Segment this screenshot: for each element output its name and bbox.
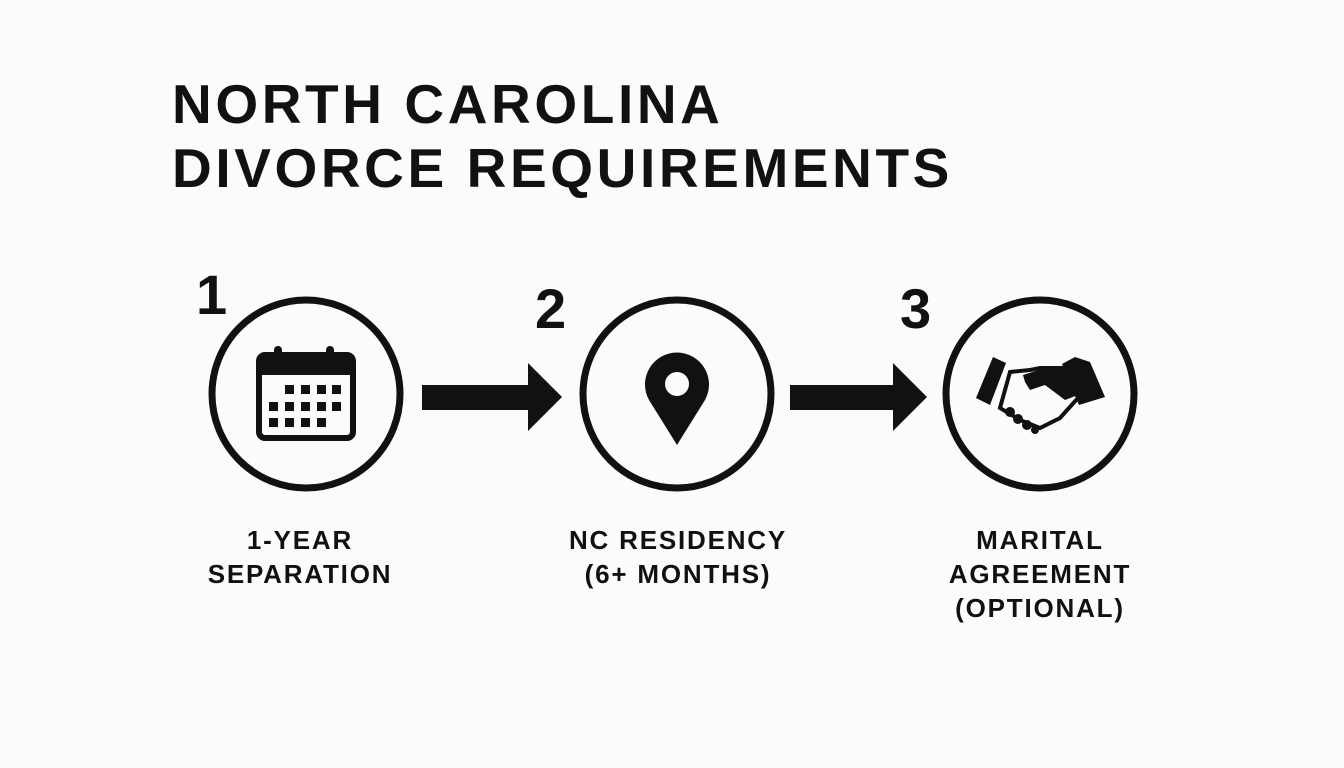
label 1: 1-YEAR bbox=[247, 525, 353, 555]
step 2: number: 2 bbox=[535, 277, 566, 340]
label 2: NC RESIDENCY bbox=[569, 525, 787, 555]
title bbox=[172, 73, 953, 199]
arrow 2 bbox=[790, 363, 927, 431]
label 1 bbox=[208, 525, 392, 589]
step 1: number: 1 bbox=[196, 263, 227, 326]
label 1: SEPARATION bbox=[208, 559, 392, 589]
arrow 1 bbox=[422, 363, 562, 431]
label 3: MARITAL bbox=[976, 525, 1104, 555]
label 3: AGREEMENT bbox=[949, 559, 1131, 589]
step 1: circle with calendar icon bbox=[212, 300, 400, 488]
step 3: number: 3 bbox=[900, 277, 931, 340]
label 2: (6+ MONTHS) bbox=[585, 559, 771, 589]
label 2 bbox=[569, 525, 787, 589]
title: DIVORCE REQUIREMENTS bbox=[172, 137, 953, 199]
title: NORTH CAROLINA bbox=[172, 73, 723, 135]
step 2: circle with location pin bbox=[583, 300, 771, 488]
step 3: circle with handshake bbox=[946, 300, 1134, 488]
label 3: (OPTIONAL) bbox=[955, 593, 1125, 623]
label 3 bbox=[949, 525, 1131, 623]
